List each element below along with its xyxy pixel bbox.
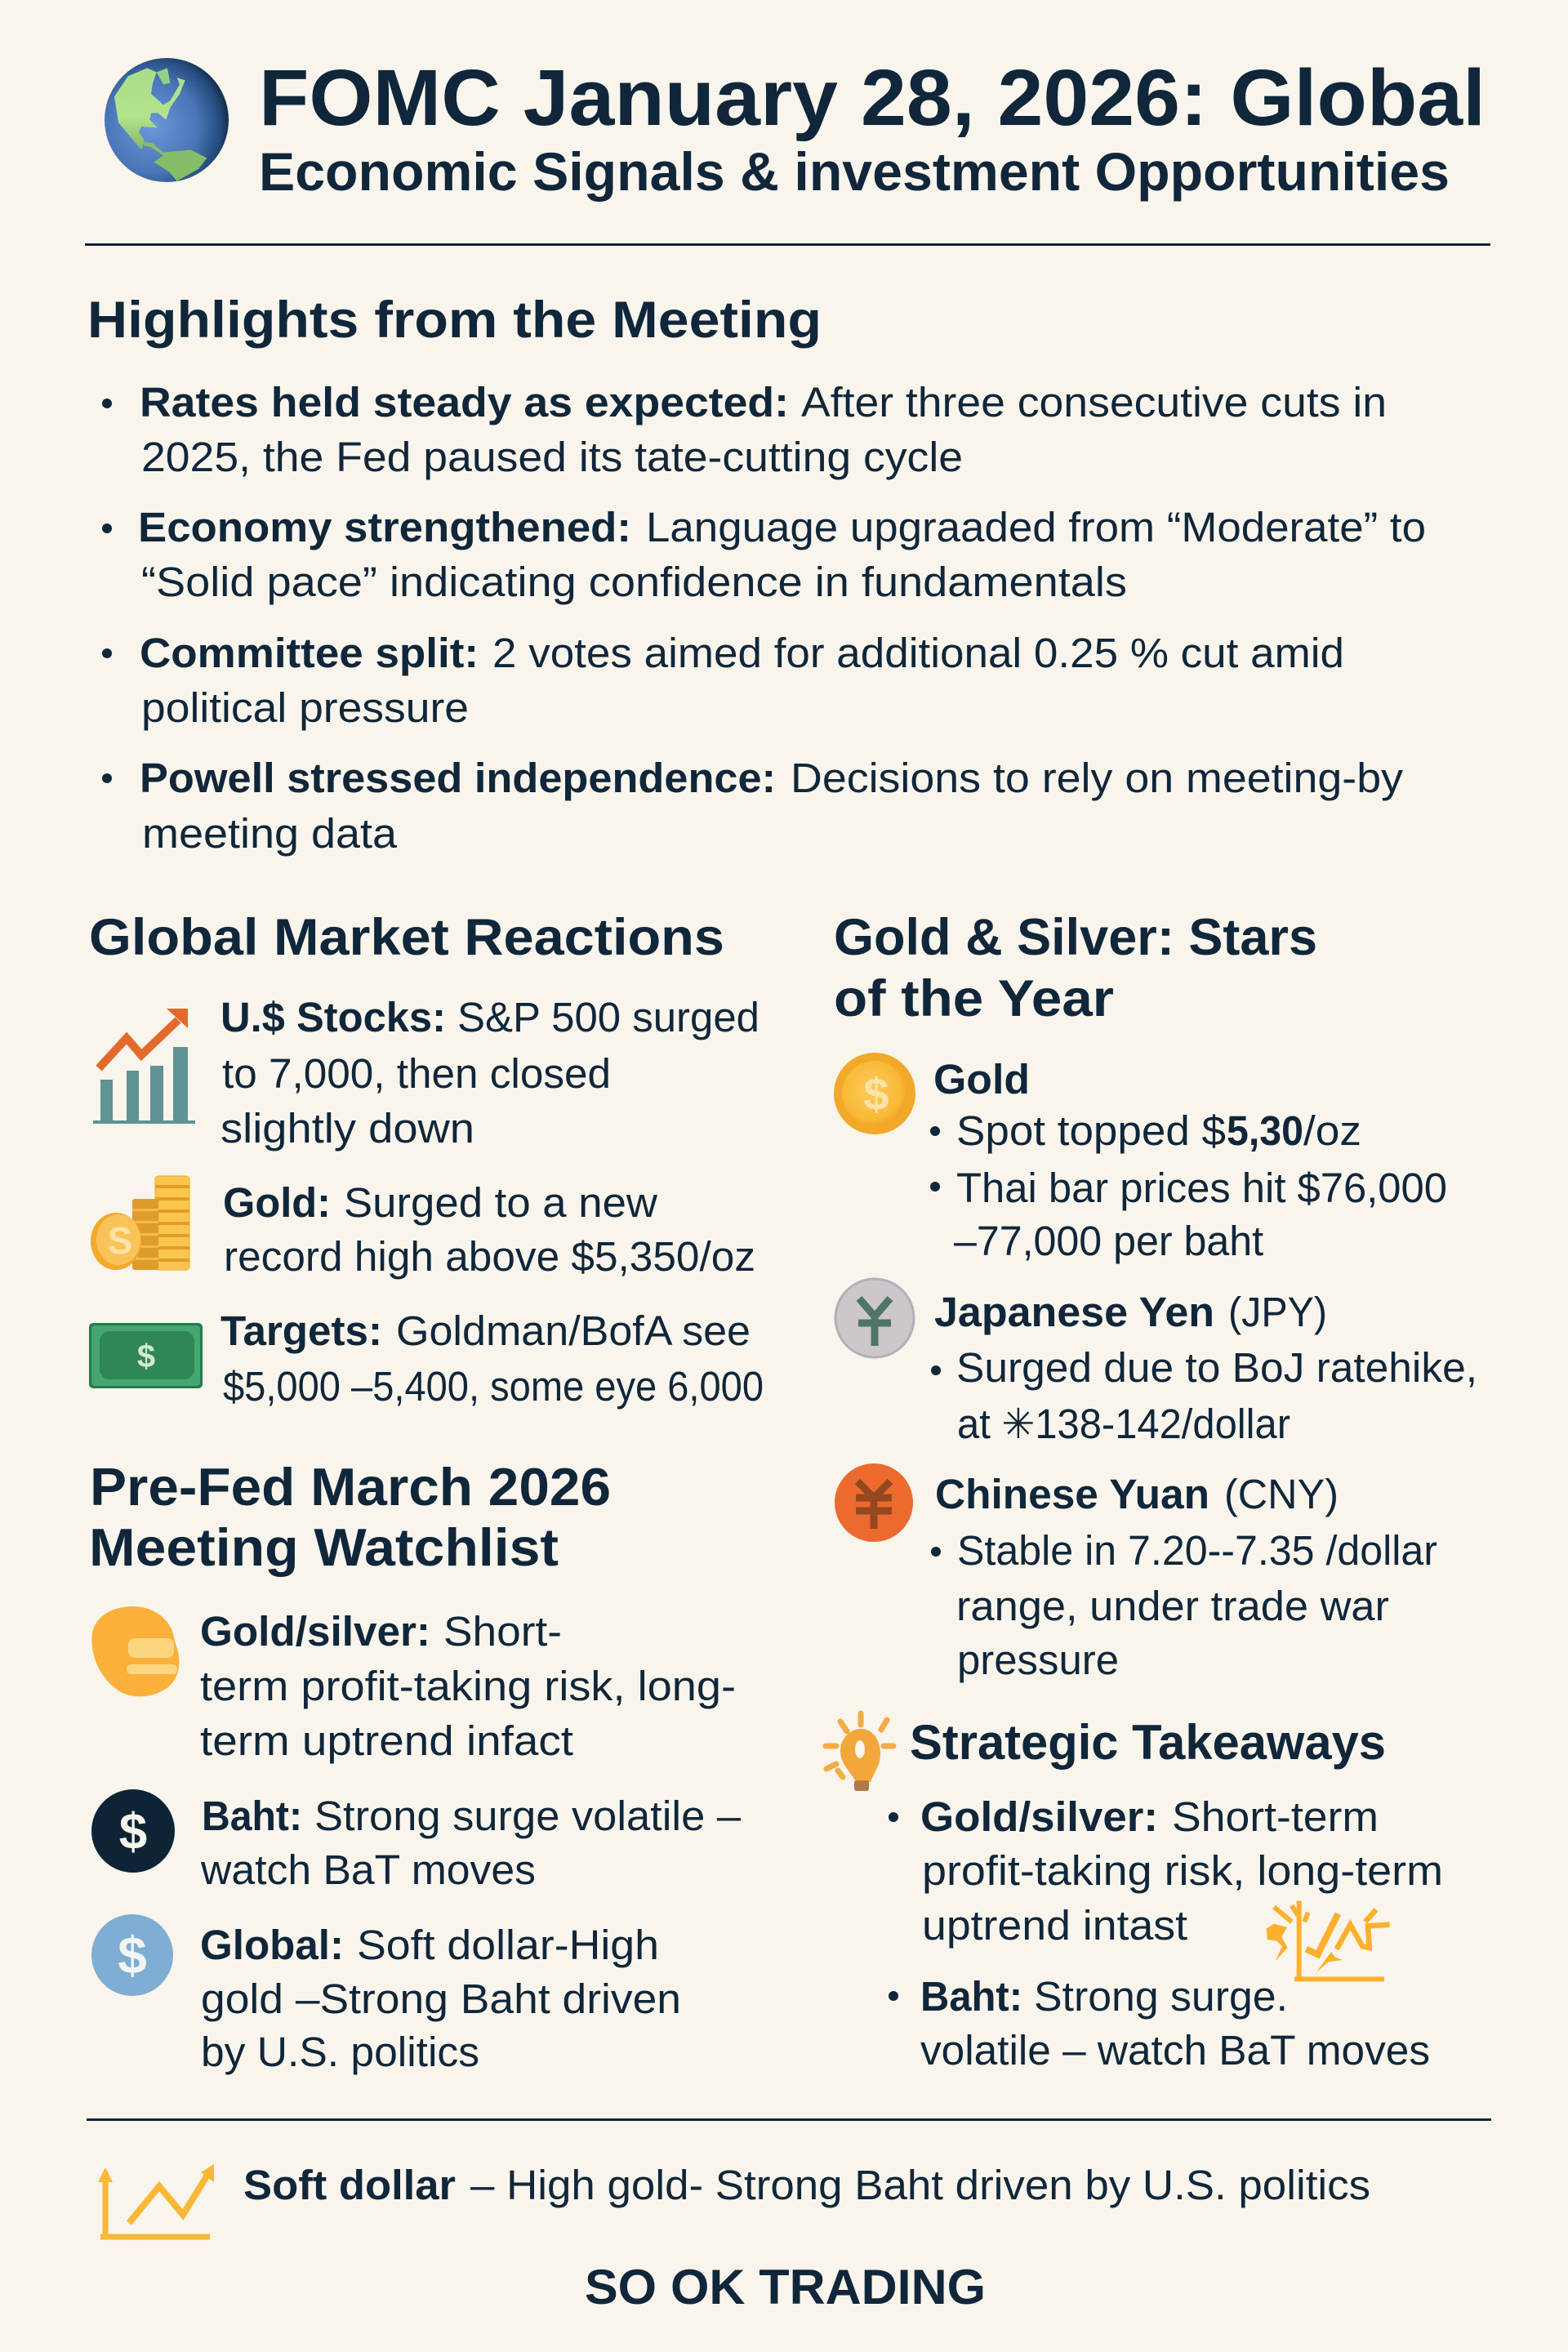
text: gold: Gold:: [223, 1179, 331, 1226]
icon: gold coin: [834, 1053, 915, 1134]
heading: watchlist: [89, 1457, 611, 1577]
text: chinese yuan: Stable in 7.20--7.35 /dollar: [957, 1527, 1437, 1574]
bullet: committee split: Committee split:: [140, 630, 479, 676]
panel: global market reactions: [89, 909, 764, 1410]
text: japanese yen: (JPY): [1228, 1289, 1327, 1335]
text: gold: Surged to a new: [344, 1179, 657, 1226]
icon: orange blob: [91, 1606, 179, 1696]
bullet: committee split: 2 votes aimed for additional 0.25 % cut amid: [492, 630, 1344, 676]
text: baht: watch BaT moves: [200, 1846, 536, 1893]
text: targets: Goldman/BofA see: [396, 1307, 751, 1354]
bullet: committee split: political pressure: [141, 684, 469, 731]
footer summary text: – High gold- Strong Baht driven by U.S. politics: [470, 2162, 1370, 2208]
text: gold: –77,000 per baht: [954, 1218, 1263, 1264]
heading: watchlist: Pre-Fed March 2026: [90, 1457, 611, 1517]
text: targets: [220, 1307, 764, 1410]
text: us stocks: U.$ Stocks:: [220, 994, 446, 1040]
icon: gold coins: S: [108, 1219, 132, 1262]
icon: globe: [105, 58, 229, 182]
icon: abstract gold chart: [1267, 1901, 1390, 1979]
heading: gold and silver: of the Year: [834, 970, 1114, 1027]
bullet: rates held steady: After three consecutive cuts in: [801, 379, 1387, 425]
bullet: rates held steady: [102, 379, 1387, 480]
text: baht: Strong surge volatile –: [314, 1793, 742, 1839]
title: [259, 53, 1486, 202]
heading: gold and silver: [834, 909, 1317, 1027]
text: targets: Targets:: [220, 1307, 382, 1354]
text: global: by U.S. politics: [201, 2029, 479, 2075]
bullet: baht: [889, 1973, 1430, 2074]
bullet: rates held steady: Rates held steady as expected:: [140, 379, 789, 425]
heading: strategic takeaways: Strategic Takeaways: [910, 1715, 1386, 1770]
bullet: committee split: [102, 630, 1344, 731]
text: chinese yuan: pressure: [957, 1637, 1119, 1683]
footer summary text: Soft dollar: [243, 2162, 456, 2208]
text: gold: [930, 1056, 1447, 1264]
text: gold: 5,30: [1227, 1107, 1303, 1154]
bullet: economy strengthened: Language upgraaded from “Moderate” to: [646, 504, 1426, 550]
text: baht: Baht:: [202, 1793, 302, 1839]
text: us stocks: slightly down: [220, 1105, 474, 1152]
icon: banknote: $: [137, 1339, 155, 1374]
bullet: gold/silver: Gold/silver:: [920, 1793, 1158, 1840]
title: Economic Signals & investment Opportunities: [259, 141, 1450, 202]
bullet: gold/silver: uptrend intast: [922, 1902, 1187, 1949]
icon: light bulb: [826, 1713, 893, 1791]
bullet: baht: volatile – watch BaT moves: [920, 2027, 1430, 2074]
bullet: economy strengthened: Economy strengthened:: [138, 504, 631, 550]
heading: global market reactions: Global Market Reactions: [89, 909, 724, 966]
bullet: powell independence: [102, 755, 1404, 857]
text: gold/silver: Gold/silver:: [200, 1608, 430, 1655]
text: gold: record high above $5,350/oz: [224, 1233, 755, 1280]
text: gold: Spot topped $: [956, 1107, 1226, 1154]
heading: highlights: Highlights from the Meeting: [87, 292, 822, 349]
text: global: gold –Strong Baht driven: [201, 1976, 681, 2022]
icon: blue dollar: $: [118, 1926, 147, 1984]
text: japanese yen: Surged due to BoJ ratehike,: [956, 1344, 1477, 1391]
icon: gold coins: [91, 1176, 189, 1270]
icon: yuan coin: [835, 1463, 913, 1542]
text: chinese yuan: (CNY): [1224, 1471, 1339, 1517]
icon: yen coin: [835, 1279, 914, 1357]
bullet: gold/silver: [889, 1793, 1443, 1949]
bullet: economy strengthened: “Solid pace” indicating confidence in fundamentals: [141, 559, 1127, 605]
text: japanese yen: [931, 1289, 1477, 1447]
text: us stocks: [220, 994, 760, 1152]
icon: blue dollar: [91, 1914, 173, 1996]
text: gold/silver: [200, 1608, 736, 1764]
panel: highlights from the meeting: [87, 292, 1426, 857]
heading: watchlist: Meeting Watchlist: [89, 1517, 559, 1577]
text: us stocks: S&P 500 surged: [457, 994, 760, 1040]
text: chinese yuan: Chinese Yuan: [935, 1471, 1209, 1517]
text: chinese yuan: [931, 1471, 1437, 1683]
icon: gold coin: $: [863, 1068, 889, 1120]
text: gold/silver: term uptrend infact: [200, 1717, 573, 1764]
text: gold: /oz: [1303, 1107, 1361, 1154]
bullet: powell independence: meeting data: [142, 810, 398, 857]
panel: strategic takeaways: [826, 1713, 1443, 2074]
text: global: [200, 1922, 681, 2075]
text: gold: [223, 1179, 755, 1280]
bullet: gold/silver: Short-term: [1172, 1793, 1379, 1840]
text: targets: $5,000 –5,400, some eye 6,000: [223, 1363, 764, 1410]
bullet: powell independence: Powell stressed independence:: [140, 755, 776, 801]
text: gold/silver: term profit-taking risk, long-: [200, 1663, 736, 1709]
text: gold: Gold: [933, 1056, 1030, 1102]
icon: banknote: [89, 1323, 203, 1388]
title: FOMC January 28, 2026: Global: [259, 53, 1486, 142]
text: us stocks: to 7,000, then closed: [222, 1050, 611, 1097]
bullet: economy strengthened: [102, 504, 1426, 605]
panel: gold and silver: [834, 909, 1477, 1683]
icon: stock chart: [93, 1009, 195, 1124]
text: chinese yuan: range, under trade war: [956, 1583, 1389, 1629]
text: japanese yen: at ✳138-142/dollar: [957, 1401, 1290, 1447]
text: japanese yen: Japanese Yen: [934, 1289, 1214, 1335]
bullet: gold/silver: profit-taking risk, long-term: [922, 1847, 1443, 1894]
brand name: SO OK TRADING: [585, 2260, 986, 2314]
icon: navy dollar: [91, 1789, 175, 1873]
text: gold: Thai bar prices hit $76,000: [956, 1165, 1447, 1211]
bullet: baht: Baht:: [920, 1973, 1022, 2020]
text: gold/silver: Short-: [443, 1608, 562, 1655]
text: global: Global:: [200, 1922, 344, 1968]
text: baht: [200, 1793, 742, 1893]
icon: navy dollar: $: [119, 1804, 147, 1860]
bullet: powell independence: Decisions to rely on meeting-by: [791, 755, 1404, 801]
bullet: baht: Strong surge.: [1034, 1973, 1288, 2020]
heading: gold and silver: Gold & Silver: Stars: [834, 909, 1317, 966]
icon: rising chart: [98, 2164, 214, 2238]
bullet: rates held steady: 2025, the Fed paused its tate-cutting cycle: [141, 434, 963, 480]
text: global: Soft dollar-High: [357, 1922, 659, 1968]
panel: pre-fed march 2026 watchlist: [89, 1457, 742, 2075]
